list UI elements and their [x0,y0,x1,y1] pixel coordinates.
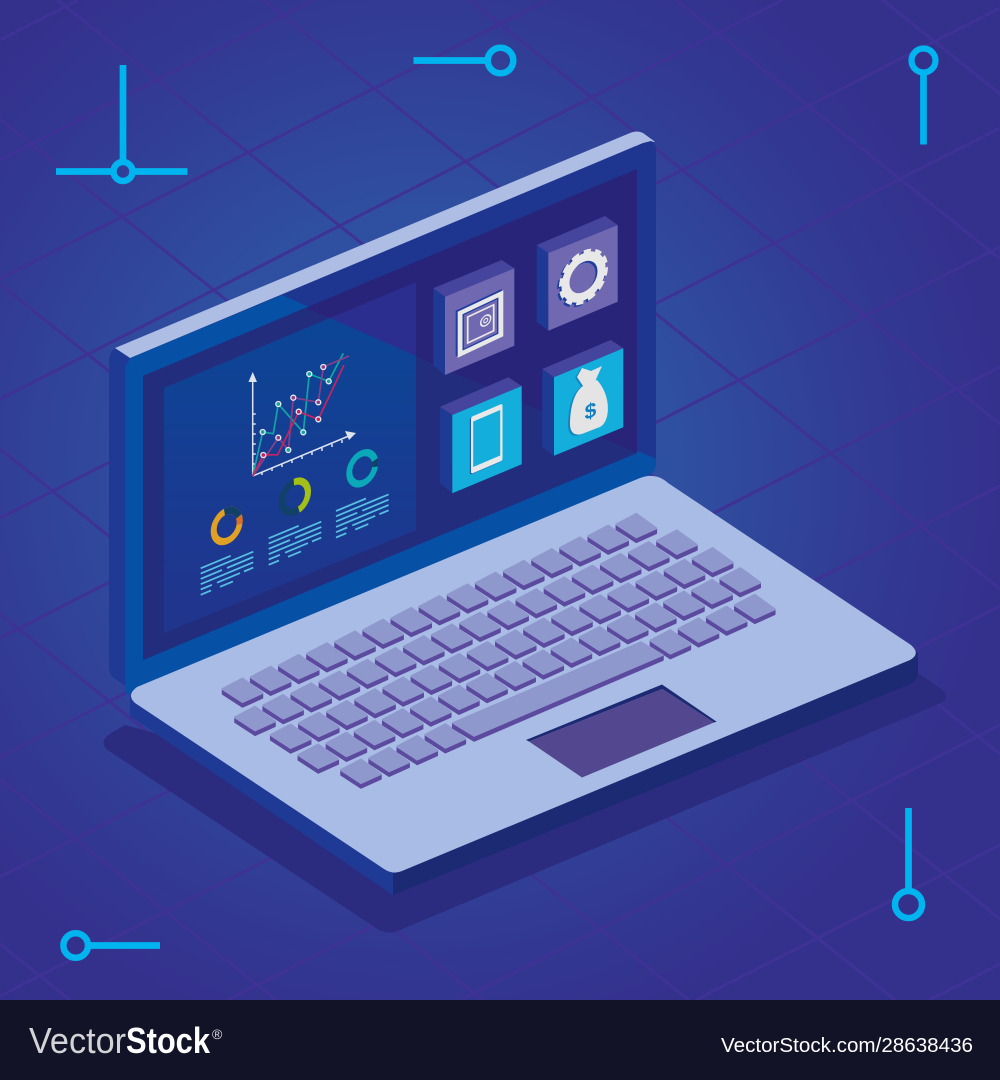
key row 4 [298,568,760,773]
footer logo: ® [212,1026,223,1042]
chart axes [248,372,356,476]
gear icon [559,243,606,313]
phone icon [470,403,502,475]
laptop lid [109,132,656,695]
footer image id: VectorStock.com/28638436 [721,1035,973,1057]
chart nodes [260,364,331,458]
purple series [253,356,349,476]
key row 3 [271,548,733,753]
connector: bottom left [63,933,160,958]
donut: orange [210,501,243,551]
text lines: block 2 [269,522,321,565]
laptop base [130,476,918,895]
connector: top right [912,48,936,144]
lid top strip [115,132,655,358]
laptop [103,132,946,933]
key row 5 left [341,724,465,788]
app tile: money bag [542,340,623,456]
footer logo: Vector [29,1020,126,1061]
base top [131,476,916,873]
trackpad [526,684,717,778]
connector: top centre [414,48,513,73]
crimson series [253,365,344,476]
teal series [253,353,343,476]
donut: green [281,476,309,518]
text lines: block 3 [336,494,389,538]
dollar sign: $ [585,396,596,425]
connector: bottom right [895,808,922,918]
footer logo [29,1020,223,1061]
key row 1 [222,514,656,707]
key row 2 [235,530,697,735]
footer logo: Stock [126,1020,211,1061]
bezel reflection [125,295,656,695]
base right side [393,652,918,895]
space bar [453,642,663,741]
dashboard panel [164,318,416,633]
lid bezel [125,141,656,695]
keyboard [222,514,775,788]
app tile: gear [537,216,618,331]
app tile: safe [433,260,514,375]
lid back edge [109,348,132,690]
donut: teal [346,444,378,492]
line chart [248,353,356,476]
connector: top left [56,65,188,181]
footer bar [0,1000,1000,1080]
text lines: block 1 [201,552,253,595]
key row 5 right [650,595,775,659]
laptop shadow [103,673,946,933]
screen [143,169,637,660]
base left side [130,695,393,895]
safe icon [456,288,503,359]
app tile: phone [440,377,522,493]
screen lower tint [143,308,637,660]
dashboard panel upper [330,282,416,356]
